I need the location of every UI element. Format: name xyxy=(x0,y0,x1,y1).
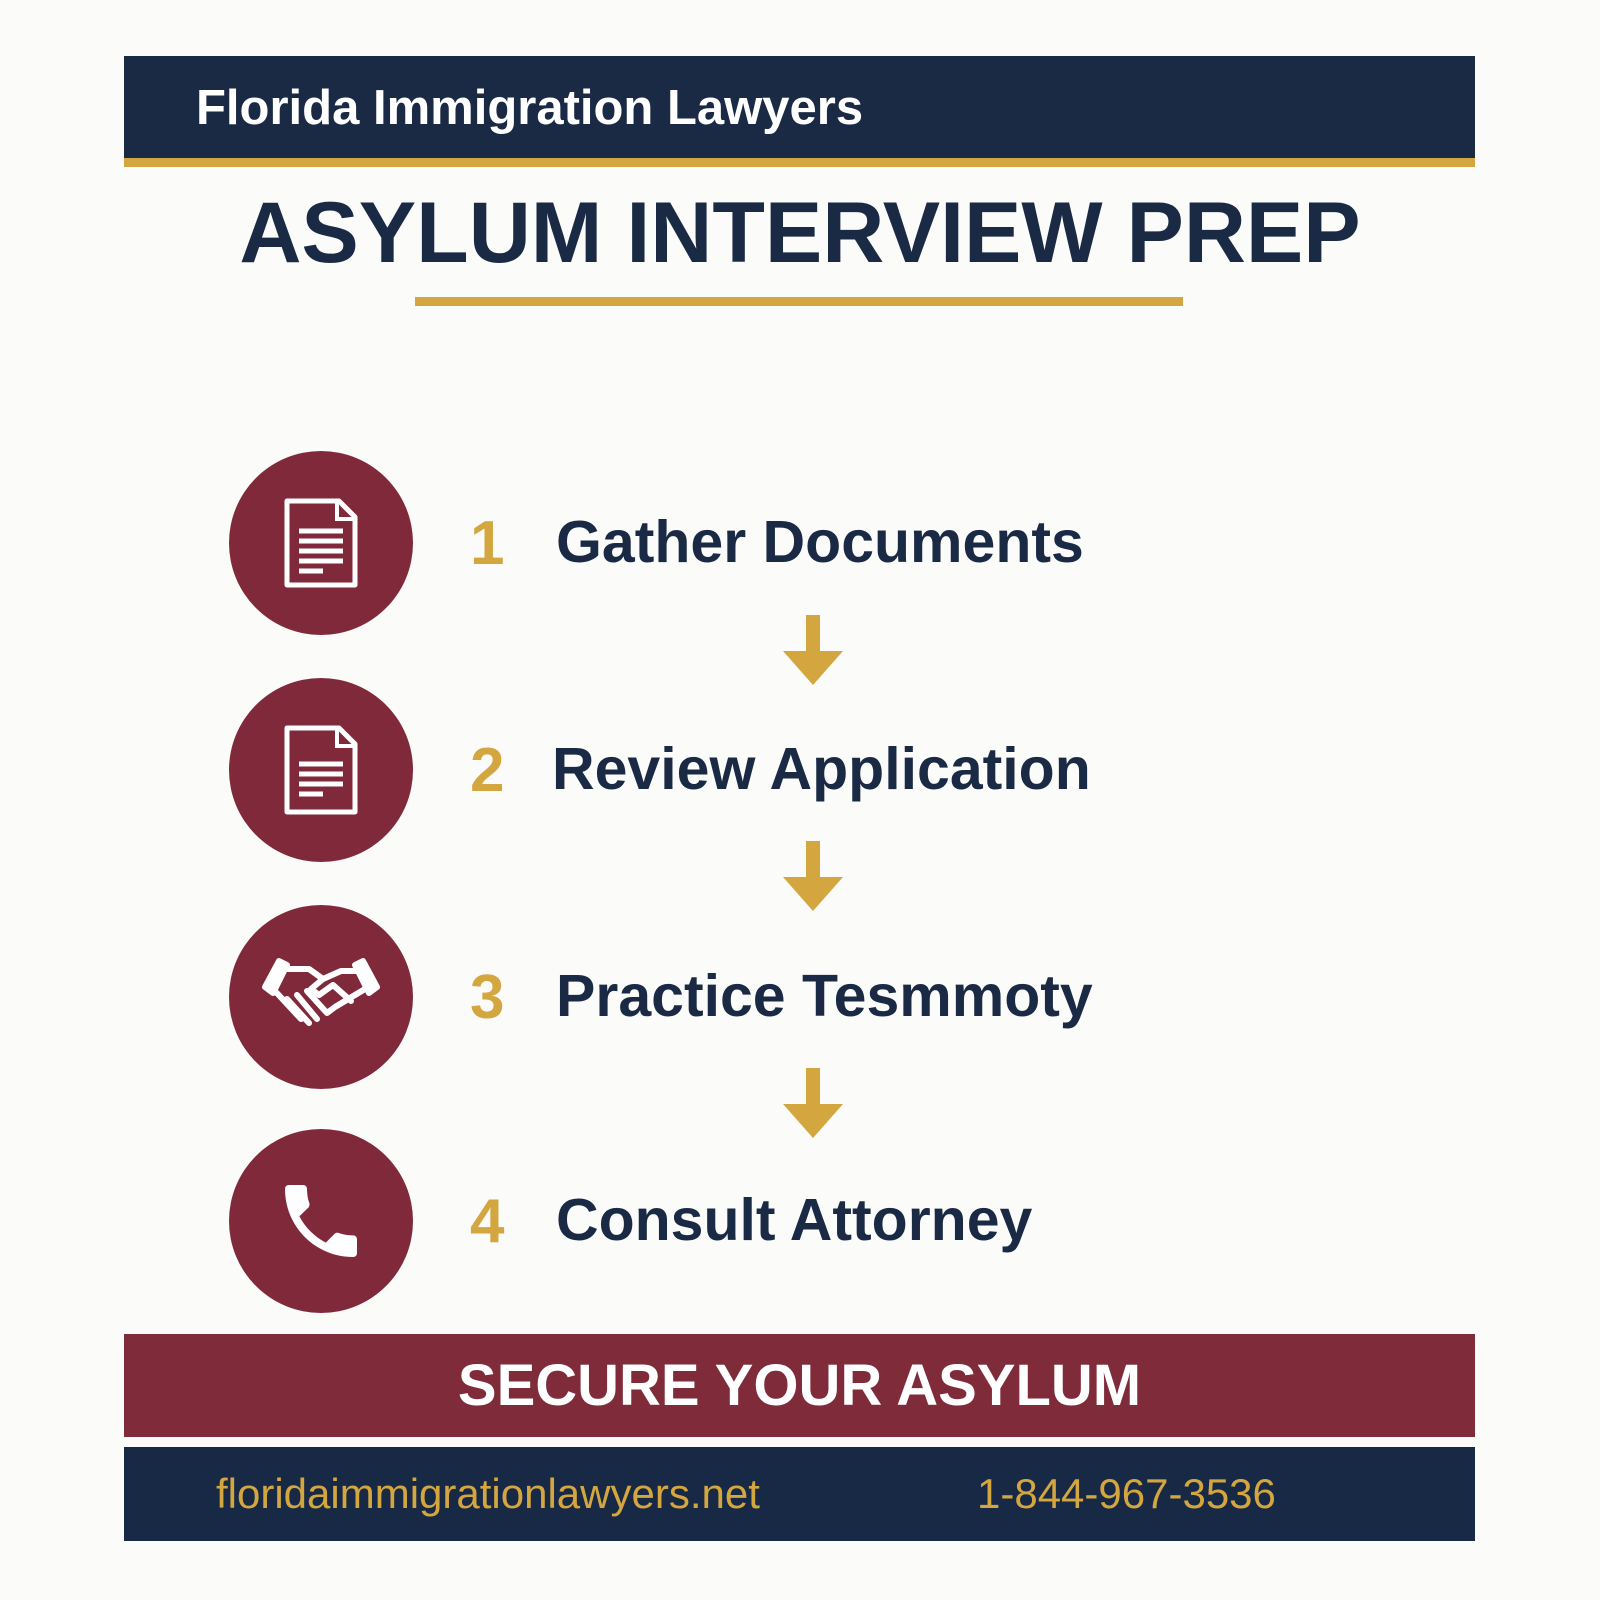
step 4 xyxy=(229,1129,1032,1313)
arrow 2 xyxy=(783,841,843,911)
step 2 xyxy=(229,678,1091,862)
step text: Review Application xyxy=(552,736,1091,802)
phone: 1-844-967-3536 xyxy=(977,1470,1276,1517)
arrow 1 xyxy=(783,615,843,685)
number 1: 1 xyxy=(470,509,504,578)
step text: Consult Attorney xyxy=(556,1187,1032,1253)
icon: handshake xyxy=(229,905,413,1089)
banner text: SECURE YOUR ASYLUM xyxy=(458,1353,1141,1418)
number 3: 3 xyxy=(470,963,504,1032)
step 1 xyxy=(229,451,1084,635)
icon: phone xyxy=(229,1129,413,1313)
title: ASYLUM INTERVIEW PREP xyxy=(239,185,1361,281)
icon: document xyxy=(229,451,413,635)
header bar xyxy=(124,56,1475,167)
step 3 xyxy=(229,905,1093,1089)
step text: Practice Tesmmoty xyxy=(556,963,1093,1029)
header text: Florida Immigration Lawyers xyxy=(196,81,863,135)
website: floridaimmigrationlawyers.net xyxy=(216,1470,760,1517)
arrow 3 xyxy=(783,1068,843,1138)
title underline xyxy=(415,297,1183,306)
number 2: 2 xyxy=(470,736,504,805)
footer bar xyxy=(124,1447,1475,1541)
step text: Gather Documents xyxy=(556,509,1084,575)
number 4: 4 xyxy=(470,1187,504,1256)
red banner xyxy=(124,1334,1475,1437)
icon: document xyxy=(229,678,413,862)
